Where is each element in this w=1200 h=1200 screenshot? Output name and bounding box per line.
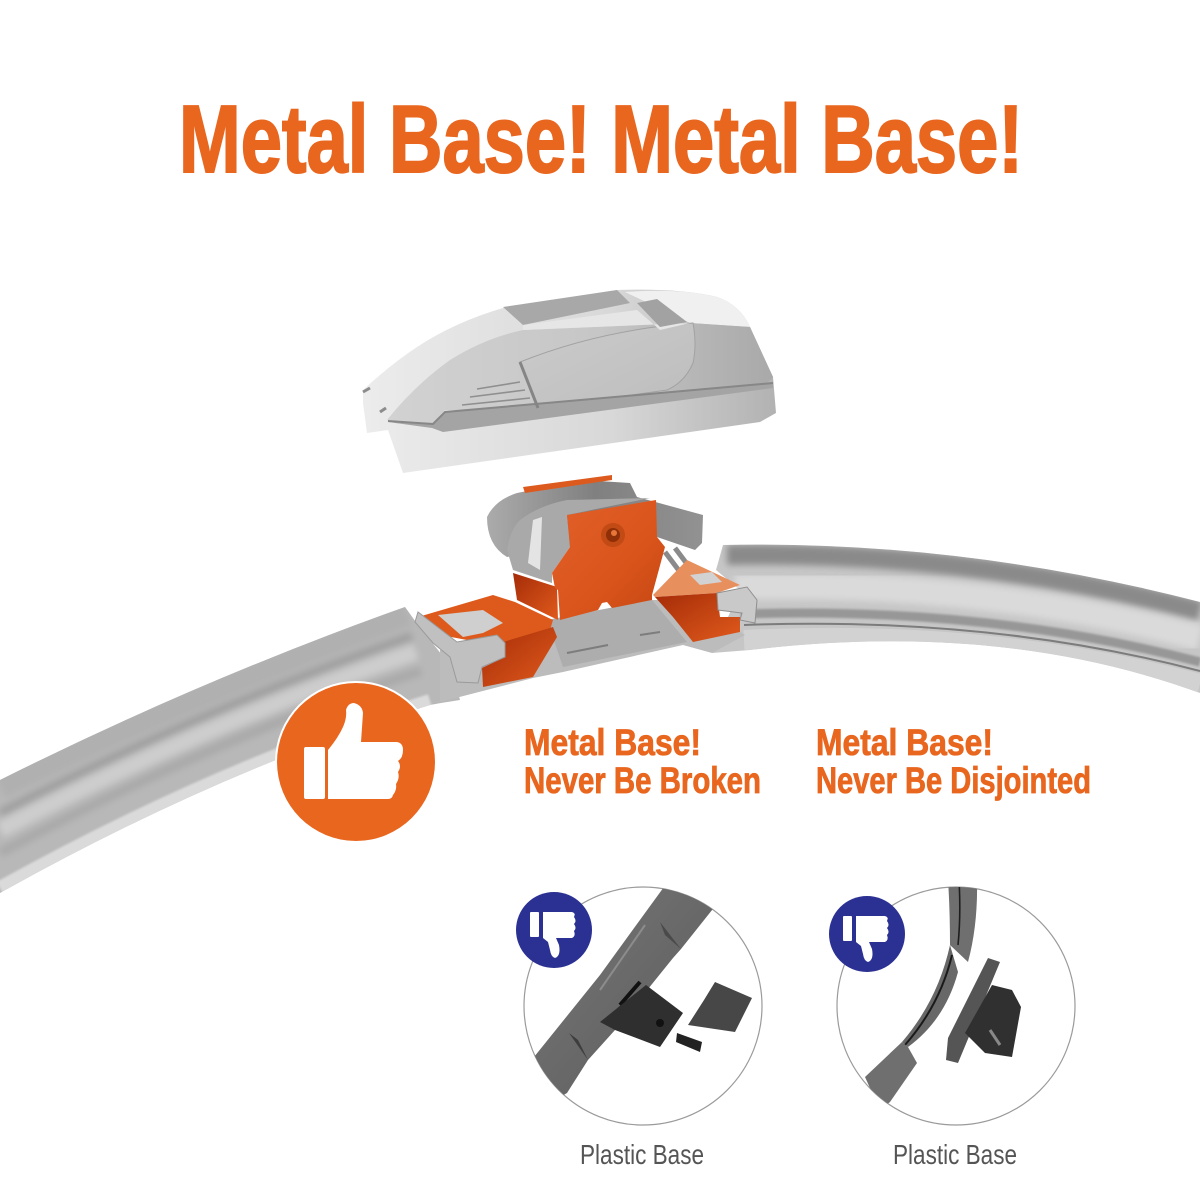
panel: plastic base, disjointed — [837, 880, 1075, 1125]
metal base mechanism — [415, 475, 757, 702]
right orange foot — [653, 560, 740, 597]
right blade section — [712, 544, 1200, 693]
panel: plastic base, broken — [524, 880, 762, 1125]
callout: never be broken: Metal Base! — [524, 722, 701, 763]
orange centre plate — [552, 500, 665, 620]
orange top strip — [523, 475, 612, 493]
plate rivet — [601, 523, 625, 547]
callout: never be disjointed: Metal Base! — [816, 722, 993, 763]
disjointed blade — [865, 880, 1021, 1110]
grey rear arm — [487, 480, 703, 557]
cover slots — [503, 290, 690, 330]
detached bracket — [946, 958, 1000, 1063]
blade with broken plastic base — [530, 880, 752, 1100]
left blade section — [0, 600, 470, 900]
orange rear plate — [513, 573, 558, 620]
right silver corner bracket — [717, 587, 757, 623]
icon: thumbs down, right — [829, 896, 905, 972]
caption: plastic base right: Plastic Base — [893, 1139, 1017, 1170]
small clip — [676, 1033, 702, 1052]
small springs — [665, 548, 690, 572]
caption: plastic base left: Plastic Base — [580, 1139, 704, 1170]
silver front arm — [507, 498, 650, 583]
left orange foot — [418, 595, 553, 642]
icon: thumbs down, left — [516, 892, 592, 968]
thumbs-up badge — [275, 681, 437, 843]
black bracket — [600, 985, 683, 1047]
separated cover — [688, 982, 752, 1032]
wiper cover (grey, lifted off) — [363, 290, 776, 473]
callout: never be disjointed: Never Be Disjointed — [816, 760, 1091, 801]
left silver corner bracket — [415, 612, 505, 683]
icon: thumbs up — [304, 703, 403, 799]
silver centre base — [440, 600, 745, 702]
callout: never be broken: Never Be Broken — [524, 760, 761, 801]
